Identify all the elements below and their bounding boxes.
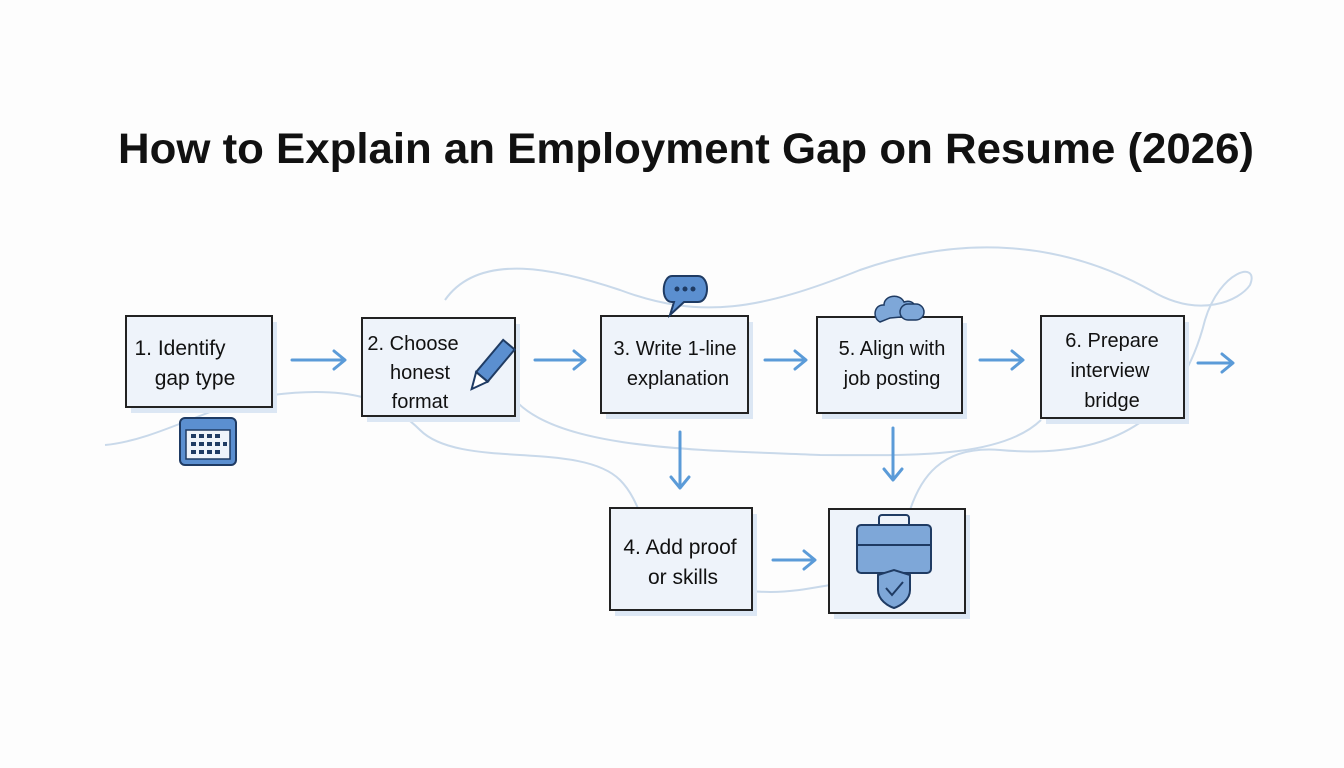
step 4 box: 4. Add proof: [623, 536, 737, 559]
step 5 box: job posting: [843, 368, 940, 390]
title: How to Explain an Employment Gap on Resume (2026): [118, 125, 1254, 173]
step 6 box: bridge: [1084, 390, 1140, 412]
step 5 box: 5. Align with: [839, 338, 945, 360]
icon: cloud chat: [875, 296, 924, 322]
step 5 box: [817, 317, 967, 419]
icon: speech bubble: [664, 276, 707, 315]
step 3 box: 3. Write 1-line: [613, 338, 737, 360]
briefcase box: [829, 509, 970, 619]
step 2 box: 2. Choose: [367, 333, 459, 355]
icon: briefcase with shield: [857, 515, 931, 608]
step 1 box: 1. Identify: [134, 337, 226, 360]
step 6 box: [1041, 316, 1189, 424]
icon: pencil: [466, 340, 515, 394]
step 2 box: format: [392, 391, 449, 413]
step 1 box: [126, 316, 277, 413]
step 4 box: [610, 508, 757, 616]
step 3 box: explanation: [627, 368, 729, 390]
step 3 box: [601, 316, 753, 419]
step 4 box: or skills: [648, 566, 718, 589]
step 2 box: [362, 318, 520, 422]
step 6 box: 6. Prepare: [1065, 330, 1159, 352]
step 6 box: interview: [1071, 360, 1150, 382]
arrows: [292, 351, 1233, 569]
icon: calendar: [180, 418, 236, 465]
step 2 box: honest: [390, 362, 450, 384]
step 1 box: gap type: [155, 367, 235, 390]
